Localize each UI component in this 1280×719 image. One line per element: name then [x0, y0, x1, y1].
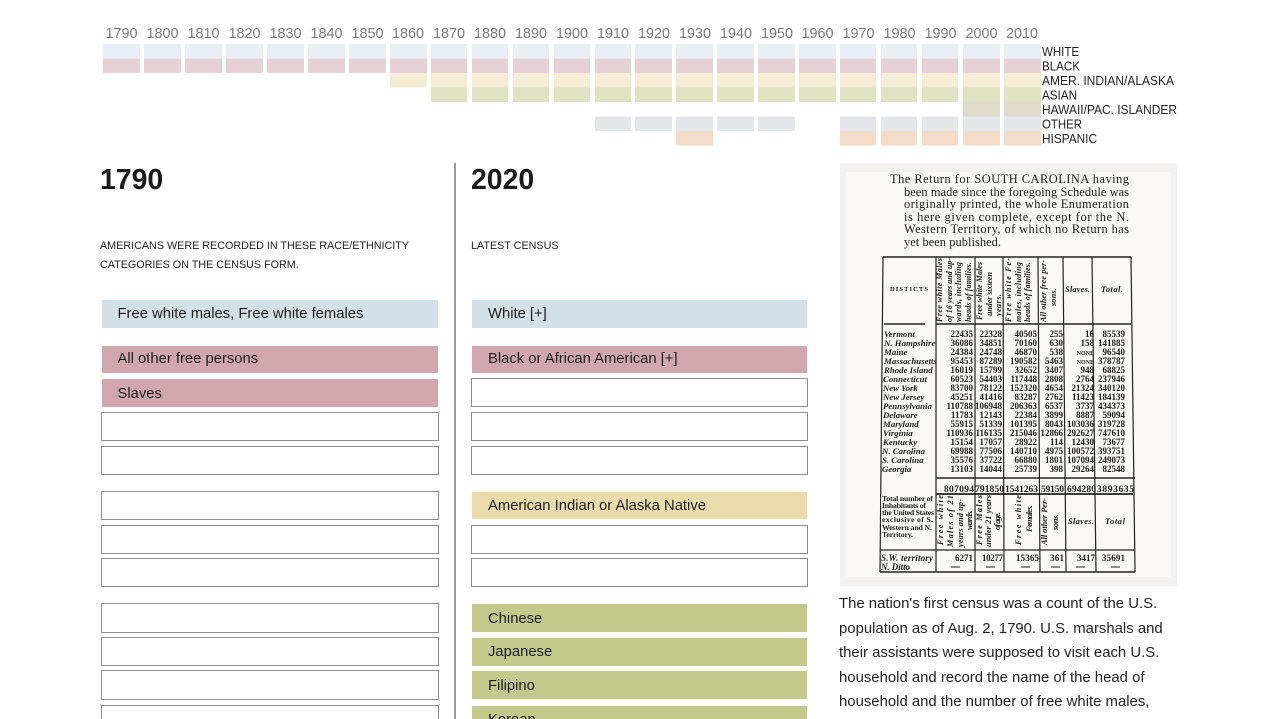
heading: 2020: 2020: [471, 164, 534, 196]
district numbers: 110936: [946, 428, 973, 438]
document note: Western Territory, of which no Return has: [904, 222, 1129, 236]
district numbers: 948: [1080, 365, 1094, 375]
district names: S. Carolina: [882, 455, 924, 465]
table column headers: Free white Fe-: [1004, 258, 1013, 323]
district numbers: 340120: [1098, 383, 1126, 393]
totals row: 791850: [975, 485, 1004, 495]
empty slot: [471, 558, 808, 587]
district names: New Jersey: [882, 392, 924, 402]
district numbers: 12430: [1072, 437, 1094, 447]
district names: Maine: [883, 347, 908, 357]
district numbers: 4975: [1045, 446, 1064, 456]
category: all other free persons: [102, 346, 438, 373]
district numbers: 2762: [1045, 392, 1064, 402]
district numbers: 378787: [1098, 356, 1126, 366]
decade labels: 1790: [105, 26, 138, 42]
decade labels: 2000: [965, 26, 998, 42]
district numbers: 32652: [1014, 365, 1038, 375]
text: census description: household and the number of free white males,: [839, 694, 1149, 710]
district numbers: 73677: [1102, 437, 1126, 447]
lower table label: Territory.: [882, 530, 913, 539]
text: census description: household and record the name of the head of: [839, 670, 1144, 686]
territory rows: N. Ditto: [880, 562, 910, 572]
decade labels: 1950: [761, 26, 793, 42]
district numbers: NONE: [1077, 351, 1094, 357]
decade labels: 1900: [556, 26, 588, 42]
district numbers: 77506: [980, 446, 1002, 456]
totals row: 1541263: [1005, 485, 1038, 495]
district numbers: 141885: [1098, 338, 1126, 348]
district names: N. Carolina: [881, 446, 926, 456]
row: black: [103, 58, 1041, 73]
table column headers: All other free per-: [1039, 260, 1048, 323]
district numbers: 35576: [950, 455, 974, 465]
district numbers: 22435: [950, 329, 974, 339]
row: hispanic: [676, 131, 1041, 146]
heading: 1790: 1790: [100, 164, 163, 196]
district numbers: 70160: [1014, 338, 1038, 348]
table column headers: Total.: [1101, 284, 1123, 294]
territory rows: 3417: [1077, 553, 1096, 563]
district numbers: 69988: [950, 446, 974, 456]
document table rules: [880, 257, 1135, 572]
table column headers: years.: [994, 294, 1003, 317]
decade labels: 1940: [720, 26, 752, 42]
districts header: DISTICTS: [890, 286, 928, 293]
district names: Virginia: [883, 428, 913, 438]
lower table headers: years and up-: [956, 499, 965, 548]
category: chinese: Chinese: [488, 611, 542, 627]
district numbers: 100572: [1067, 446, 1094, 456]
lower table headers: Free white: [1014, 495, 1023, 546]
category: japanese: [472, 638, 807, 666]
district numbers: 54403: [980, 374, 1002, 384]
district names: Delaware: [882, 410, 918, 420]
decade labels: 1890: [515, 26, 547, 42]
district numbers: 1801: [1045, 455, 1064, 465]
category: black or african american: [472, 346, 807, 373]
district numbers: 40505: [1014, 329, 1038, 339]
district numbers: 107094: [1067, 455, 1094, 465]
document note: is here given complete, except for the N.: [904, 210, 1129, 224]
empty slot: [100, 491, 438, 520]
district names: Massachusetts: [883, 356, 937, 366]
district names: Pennsylvania: [883, 401, 932, 411]
district numbers: 8887: [1076, 410, 1094, 420]
district numbers: 319728: [1098, 419, 1126, 429]
district numbers: 215046: [1010, 428, 1038, 438]
district numbers: 747610: [1098, 428, 1126, 438]
totals row: 59150: [1041, 485, 1064, 495]
column divider: [454, 163, 456, 719]
district numbers: 24384: [950, 347, 974, 357]
lower table headers: sons.: [1051, 514, 1060, 531]
decade labels: 1820: [228, 26, 261, 42]
document note: originally printed, the whole Enumeration: [904, 197, 1129, 211]
district numbers: 206363: [1010, 401, 1038, 411]
lower table label: Western and N.: [882, 523, 932, 532]
district numbers: 101395: [1010, 419, 1038, 429]
category: slaves: Slaves: [118, 386, 162, 402]
district numbers: 190582: [1010, 356, 1038, 366]
lower table label: Inhabitants of: [882, 501, 926, 510]
district numbers: 538: [1050, 347, 1064, 357]
category: free white: [102, 300, 438, 328]
empty slot: [100, 603, 438, 632]
district numbers: 85539: [1102, 329, 1126, 339]
district numbers: 83700: [950, 383, 974, 393]
decade labels: 1980: [883, 26, 916, 42]
district numbers: 16: [1085, 329, 1094, 339]
lower table headers: Females.: [1025, 505, 1034, 533]
text: census description: [839, 596, 1163, 710]
decade labels: 1860: [392, 26, 424, 42]
row: other: [595, 116, 1041, 131]
timeline chart: census categories by decade: [103, 26, 1177, 146]
document note: been made since the foregoing Schedule was: [904, 185, 1129, 199]
district numbers: 82548: [1102, 464, 1126, 474]
district numbers: 140710: [1010, 446, 1038, 456]
decade labels: 1920: [638, 26, 670, 42]
district numbers: 398: [1050, 464, 1064, 474]
district numbers: 630: [1050, 338, 1064, 348]
district numbers: 28922: [1014, 437, 1038, 447]
decade labels: 1970: [842, 26, 875, 42]
document note: [890, 172, 1129, 249]
district numbers: 34851: [980, 338, 1002, 348]
category: slaves: [102, 379, 438, 406]
empty slot: [100, 704, 438, 719]
decade labels: 2010: [1006, 26, 1038, 42]
territory rows: 361: [1050, 553, 1064, 563]
lower table headers: of age.: [993, 512, 1002, 530]
district names: Rhode Island: [883, 365, 933, 375]
lower table label: Total number of: [882, 494, 933, 503]
district numbers: 24748: [980, 347, 1002, 357]
totals row: 807094: [944, 485, 974, 495]
district numbers: 11423: [1072, 392, 1094, 402]
district numbers: 51339: [980, 419, 1002, 429]
row: white: [103, 44, 1041, 58]
district numbers: 95453: [950, 356, 974, 366]
district names: Vermont: [884, 329, 915, 339]
district numbers: 3407: [1045, 365, 1064, 375]
decade labels: 1850: [351, 26, 384, 42]
district numbers: 25739: [1014, 464, 1038, 474]
decade labels: 1990: [924, 26, 957, 42]
district numbers: 13103: [950, 464, 974, 474]
district numbers: 15154: [950, 437, 974, 447]
table column headers: Free white Males: [975, 262, 984, 321]
legend labels: BLACK: [1042, 60, 1081, 74]
decade labels: 1840: [310, 26, 343, 42]
row: hawaii / pacific islander: [963, 102, 1041, 116]
district numbers: 6537: [1045, 401, 1064, 411]
decade labels: 1810: [187, 26, 220, 42]
category: white: [472, 300, 807, 328]
table column headers: males, including: [1014, 262, 1023, 322]
decade labels: 1910: [597, 26, 629, 42]
district numbers: 83287: [1014, 392, 1038, 402]
text: census description: population as of Aug. 2, 1790. U.S. marshals and: [839, 621, 1163, 637]
table column headers: of 16 years and up-: [945, 258, 954, 322]
decade labels: 1800: [146, 26, 179, 42]
decade labels: 1930: [679, 26, 711, 42]
text: 2020 description: LATEST CENSUS: [471, 240, 559, 252]
table column headers: Slaves.: [1065, 284, 1090, 294]
district numbers: 96540: [1102, 347, 1126, 357]
table column headers: Free white Males: [935, 258, 944, 323]
lower table headers: Free Males: [975, 495, 984, 546]
territory rows: 6271: [955, 553, 974, 563]
table column headers: sons.: [1049, 288, 1058, 307]
district numbers: 117448: [1010, 374, 1037, 384]
district numbers: 114: [1050, 437, 1063, 447]
lower table headers: under 21 years: [984, 495, 993, 547]
district numbers: 249073: [1098, 455, 1126, 465]
decade labels: 1960: [801, 26, 834, 42]
empty slot: [100, 670, 438, 700]
text: census description: The nation's first census was a count of the U.S.: [839, 596, 1157, 612]
district numbers: 22328: [980, 329, 1002, 339]
empty slot: [100, 636, 438, 666]
district numbers: 292627: [1067, 428, 1094, 438]
category: japanese: Japanese: [488, 644, 552, 660]
district numbers: 12866: [1040, 428, 1064, 438]
district numbers: [946, 329, 1126, 474]
lower table headers: Slaves.: [1068, 516, 1094, 526]
district names: Maryland: [882, 419, 919, 429]
district numbers: 3737: [1076, 401, 1094, 411]
district numbers: 59094: [1102, 410, 1126, 420]
district names: Georgia: [882, 464, 912, 474]
district numbers: 36086: [950, 338, 974, 348]
district numbers: 87289: [980, 356, 1002, 366]
district names: Kentucky: [882, 437, 917, 447]
empty slot: [100, 524, 438, 554]
category: white: White [+]: [488, 306, 547, 322]
lower table headers: Males of 21: [946, 495, 955, 548]
decade labels: [105, 26, 1038, 42]
territory rows: 35691: [1102, 553, 1126, 563]
district numbers: 255: [1050, 329, 1064, 339]
category: all other free persons: All other free persons: [118, 350, 258, 366]
district numbers: 184139: [1098, 392, 1126, 402]
text: 1790 description: CATEGORIES ON THE CENSUS FORM.: [100, 258, 299, 270]
row: american indian / alaska: [390, 73, 1041, 88]
district numbers: 8043: [1045, 419, 1064, 429]
legend labels: HAWAII/PAC. ISLANDER: [1042, 103, 1177, 117]
empty slot: [471, 378, 808, 407]
lower table headers: [936, 495, 1126, 548]
district numbers: 29264: [1072, 464, 1094, 474]
text: 1790 description: [100, 240, 409, 270]
decade labels: 1870: [433, 26, 465, 42]
district numbers: 45251: [950, 392, 974, 402]
image: 1790 census return document: [840, 163, 1177, 586]
category: american indian or alaska native: [472, 492, 807, 519]
totals row: [944, 485, 1134, 495]
category: free white: Free white males, Free white females: [118, 306, 363, 322]
lower table headers: Total: [1105, 516, 1126, 526]
district names: Connecticut: [883, 374, 928, 384]
decade labels: 1830: [269, 26, 302, 42]
district names: [881, 329, 937, 474]
legend labels: OTHER: [1042, 118, 1082, 132]
district numbers: 22384: [1014, 410, 1038, 420]
table column headers: under sixteen: [985, 271, 994, 316]
empty slot: [100, 446, 438, 474]
district numbers: 11783: [951, 410, 973, 420]
empty slot: [100, 558, 438, 587]
district numbers: 37722: [980, 455, 1002, 465]
district numbers: 237946: [1098, 374, 1126, 384]
lower table label: the United States: [882, 508, 934, 517]
district numbers: 5463: [1045, 356, 1064, 366]
district numbers: 110788: [946, 401, 973, 411]
totals row: 3893635: [1097, 485, 1134, 495]
district numbers: 152320: [1010, 383, 1038, 393]
district numbers: 14044: [980, 464, 1002, 474]
category: chinese: [472, 604, 807, 632]
district numbers: 15799: [980, 365, 1002, 375]
legend labels: AMER. INDIAN/ALASKA: [1042, 74, 1175, 88]
territory rows: [880, 553, 1126, 572]
category: korean: [472, 706, 807, 719]
district numbers: 103036: [1067, 419, 1094, 429]
row: asian: [431, 88, 1041, 102]
table column headers: wards, including: [954, 262, 963, 322]
district numbers: 21324: [1072, 383, 1094, 393]
empty slot: [471, 524, 808, 554]
district numbers: 68825: [1102, 365, 1126, 375]
district numbers: 66880: [1014, 455, 1038, 465]
district numbers: 158: [1080, 338, 1094, 348]
district numbers: 3899: [1045, 410, 1064, 420]
district names: New York: [882, 383, 918, 393]
district names: N. Hampshire: [883, 338, 935, 348]
district numbers: 393751: [1098, 446, 1126, 456]
district numbers: NONE: [1077, 360, 1094, 366]
text: 1790 description: AMERICANS WERE RECORDED IN THESE RACE/ETHNICITY: [100, 240, 409, 252]
lower table headers: Free white: [936, 495, 945, 546]
category: american indian or alaska native: American Indian or Alaska Native: [488, 498, 706, 514]
empty slot: [471, 412, 808, 440]
document note: yet been published.: [904, 235, 1001, 249]
text: census description: their assistants were supposed to visit each U.S.: [839, 645, 1159, 661]
territory rows: S.W. territory: [881, 553, 934, 563]
lower table label: exclusive of S.: [882, 515, 933, 524]
district numbers: 78122: [980, 383, 1002, 393]
district numbers: 46870: [1014, 347, 1038, 357]
category: black or african american: Black or African American [+]: [488, 350, 678, 366]
empty slot: [100, 412, 438, 440]
table column headers: heads of families.: [1023, 262, 1032, 322]
lower table headers: All other Per-: [1040, 498, 1049, 546]
district numbers: 55915: [950, 419, 974, 429]
district numbers: 12143: [980, 410, 1002, 420]
table column headers: heads of families.: [964, 262, 973, 322]
legend labels: HISPANIC: [1042, 132, 1097, 146]
legend labels: WHITE: [1042, 45, 1079, 59]
category: filipino: Filipino: [488, 678, 535, 694]
decade labels: 1880: [474, 26, 506, 42]
table column headers: [935, 258, 1123, 323]
district numbers: 17057: [980, 437, 1002, 447]
lower table headers: wards.: [965, 510, 974, 530]
district numbers: 60523: [950, 374, 974, 384]
category: filipino: [472, 671, 807, 699]
district numbers: 116135: [975, 428, 1002, 438]
empty slot: [471, 446, 808, 474]
lower table label: [882, 494, 934, 539]
territory rows: 15365: [1016, 553, 1040, 563]
district numbers: 16019: [950, 365, 974, 375]
document note: The Return for SOUTH CAROLINA having: [890, 172, 1129, 186]
totals row: 694280: [1067, 485, 1096, 495]
district numbers: 2764: [1076, 374, 1094, 384]
district numbers: 4654: [1045, 383, 1064, 393]
district numbers: 434373: [1098, 401, 1126, 411]
district numbers: 41416: [980, 392, 1002, 402]
legend labels: [1042, 45, 1177, 146]
legend labels: ASIAN: [1042, 88, 1077, 102]
district numbers: 106948: [975, 401, 1002, 411]
territory rows: 10277: [982, 553, 1004, 563]
district numbers: 2808: [1045, 374, 1064, 384]
territory dashes: [951, 566, 1120, 568]
